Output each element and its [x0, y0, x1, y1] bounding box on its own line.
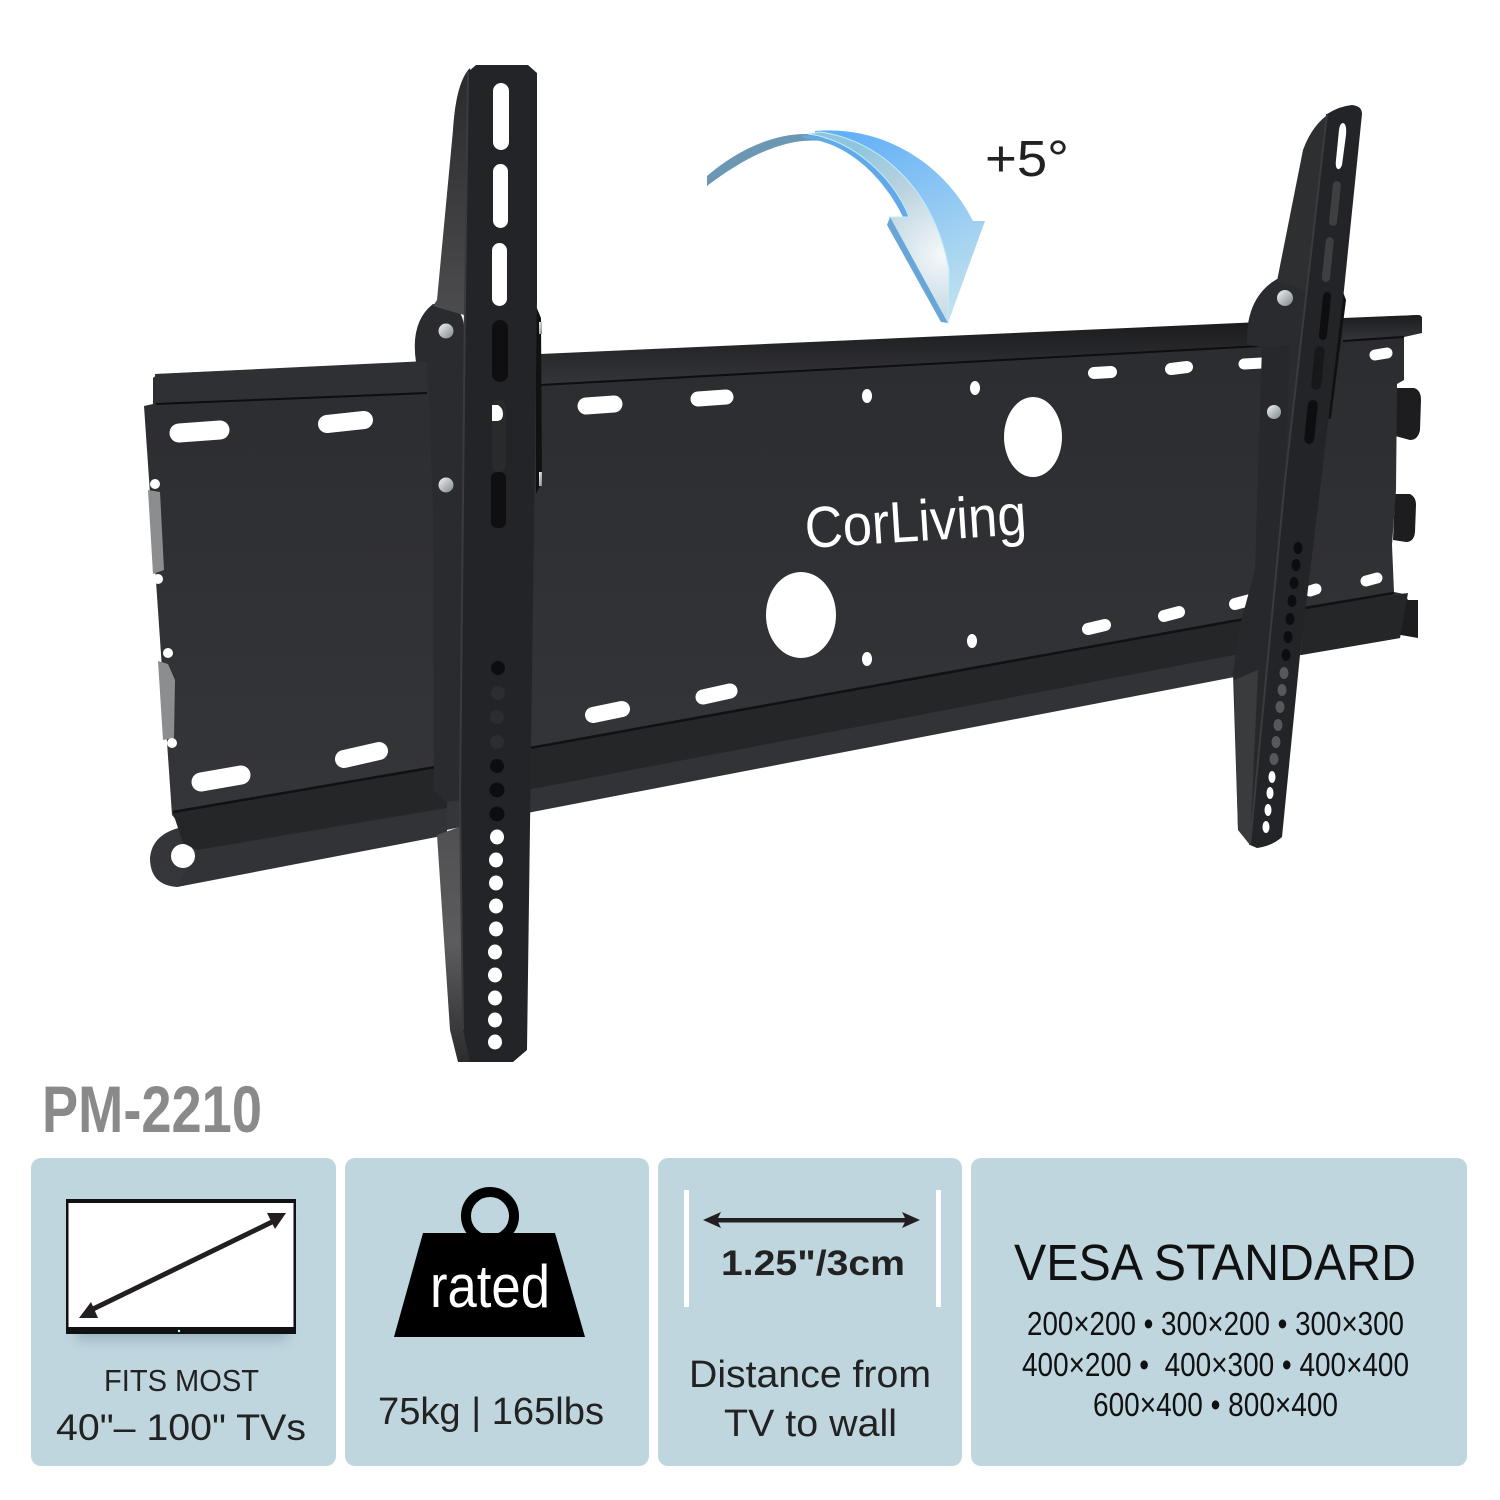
VESA sizes: 600×400 • 800×400 — [1093, 1386, 1338, 1423]
top slot — [1336, 123, 1346, 169]
right bracket — [1233, 105, 1362, 848]
front face — [1250, 105, 1362, 848]
icon: TV with diagonal — [66, 1199, 296, 1340]
lower side strip — [1234, 670, 1258, 845]
icon: weight: rated — [430, 1253, 550, 1320]
pivot side plate — [415, 304, 464, 802]
back wall plate — [144, 315, 1422, 887]
rear tabs — [1393, 388, 1421, 638]
long slots — [492, 83, 509, 306]
distance arrow — [703, 1212, 920, 1228]
panel: wall distance — [658, 1158, 962, 1466]
rear edge — [1326, 292, 1346, 420]
model number: PM-2210 — [42, 1072, 262, 1146]
left bracket — [415, 65, 542, 1062]
small holes — [862, 381, 980, 666]
front face — [460, 65, 537, 1062]
bolts — [438, 322, 542, 492]
distance value: 1.25"/3cm — [721, 1244, 905, 1283]
distance caption: Distance from — [689, 1354, 931, 1396]
lower side strip — [437, 826, 474, 1062]
size range: 40"– 100" TVs — [56, 1407, 306, 1448]
pivot side plate — [1247, 279, 1310, 620]
arrow lower side — [887, 217, 948, 323]
fits most label: FITS MOST — [104, 1363, 259, 1398]
rear edge — [536, 306, 542, 494]
horizontal slots — [179, 353, 1387, 782]
VESA sizes — [1022, 1305, 1409, 1423]
VESA sizes: 400×200 • 400×300 • 400×400 — [1022, 1346, 1409, 1383]
left silver tabs — [148, 479, 177, 748]
panel: weight capacity — [345, 1158, 649, 1466]
weight rating: 75kg | 165lbs — [378, 1391, 604, 1433]
panel: screen size — [31, 1158, 336, 1466]
tilt arrow — [707, 130, 985, 323]
distance marker bars — [684, 1190, 941, 1307]
distance caption: TV to wall — [724, 1403, 897, 1445]
lower rail — [171, 593, 1408, 887]
arrow outer wing — [815, 130, 985, 323]
arrow inner edge — [803, 135, 909, 217]
upper side strip — [1277, 113, 1330, 292]
arrow tail — [707, 134, 826, 186]
arrow face — [808, 132, 949, 323]
tilt label: +5° — [985, 130, 1069, 187]
VESA sizes: 200×200 • 300×200 • 300×300 — [1027, 1305, 1404, 1342]
upper side strip — [433, 68, 475, 315]
VESA heading: VESA STANDARD — [1014, 1234, 1416, 1291]
TV wall mount product — [144, 65, 1422, 1062]
CorLiving logo: CorLiving — [803, 482, 1028, 561]
large round holes — [766, 397, 1062, 658]
main plate body — [144, 315, 1422, 887]
dark slots — [1304, 292, 1331, 444]
top lip — [155, 315, 1422, 404]
icon: weight — [394, 1192, 585, 1337]
distance caption — [689, 1354, 931, 1445]
white gap in slot — [492, 405, 503, 421]
panel: VESA standard — [971, 1158, 1467, 1466]
adjustment holes — [488, 661, 505, 1050]
bolts — [1267, 290, 1293, 419]
dark slots — [491, 320, 508, 528]
adjustment holes — [1262, 542, 1302, 833]
grey slots — [1322, 181, 1341, 282]
